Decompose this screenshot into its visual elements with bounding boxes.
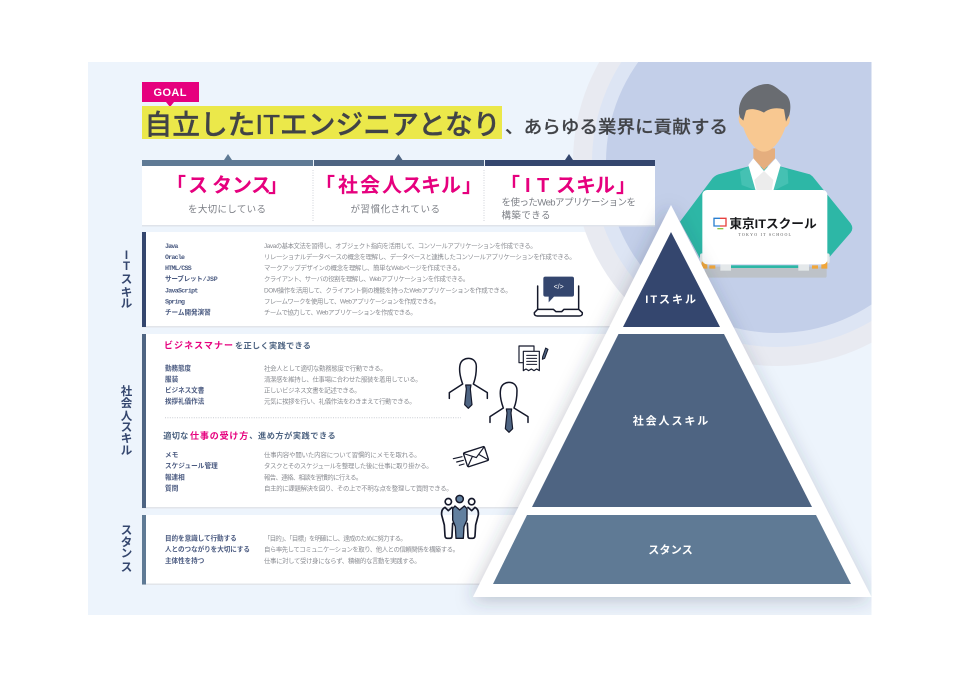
shirt [748, 158, 781, 191]
work approach rows: 報告、連絡、相談を習慣的に行える。 [264, 472, 362, 481]
hair [739, 84, 790, 122]
IT skill rows: チーム開発演習 [165, 308, 211, 317]
logo text: 東京ITスクール [729, 216, 817, 231]
panel: IT skill detail [142, 232, 662, 328]
panel: stance detail [142, 515, 542, 585]
tab: business skill [314, 154, 484, 216]
side label: business skill [121, 384, 133, 457]
side label: stance: ス [121, 562, 132, 574]
icon: documents [519, 346, 548, 371]
tier: business skill: 社会人スキル [633, 414, 708, 428]
side label: IT skill: ス [121, 274, 132, 286]
stance rows: 「目的」、「目標」を明確にし、達成のために努力する。 [264, 534, 407, 543]
stance rows: 自ら率先してコミュニケーションを取り、他人との信頼関係を構築する。 [264, 545, 459, 554]
icon: laptop code: </> [554, 284, 564, 291]
IT skill rows: HTML/CSS [165, 265, 192, 272]
stance rows: 人とのつながりを大切にする [165, 545, 250, 554]
logo icon [714, 218, 726, 229]
heading: business manners: を正しく実践できる [235, 341, 311, 351]
tab: IT skill: 構築できる [502, 210, 550, 222]
business manner rows: 社会人として適切な勤務態度で行動できる。 [264, 363, 387, 372]
heading: work approach [163, 430, 336, 441]
person left [449, 358, 487, 408]
side label: stance [121, 525, 132, 574]
person right [490, 382, 528, 432]
illustration: person with laptop: TOKYO IT SCHOOL [738, 232, 792, 237]
title: 、あらゆる業界に貢献する [505, 117, 728, 137]
IT skill rows: フレームワークを使用して、Webアプリケーションを作成できる。 [264, 296, 440, 306]
laptop screen [702, 190, 827, 264]
tier: IT skill: ITスキル [645, 294, 696, 306]
IT skill rows: マークアップデザインの概念を理解し、簡単なWebページを作成できる。 [264, 263, 464, 272]
tab: stance: を大切にしている [188, 204, 266, 216]
heading: work approach: 、進め方が実践できる [249, 431, 336, 441]
IT skill rows: Javaの基本文法を習得し、オブジェクト指向を活用して、コンソールアプリケーションを作成できる。 [264, 241, 537, 250]
side label: stance: タ [121, 536, 132, 549]
icon: envelope [453, 446, 489, 467]
side label: business skill: 会 [121, 396, 133, 410]
heading: work approach: 仕事の受け方 [190, 430, 248, 441]
icon: business people [449, 358, 528, 432]
side label: business skill: ス [121, 422, 132, 434]
title [142, 106, 728, 140]
icon: laptop code [534, 277, 582, 316]
IT skill rows: Spring [165, 298, 185, 306]
business manner rows: 正しいビジネス文書を記述できる。 [264, 386, 361, 394]
IT skill rows: Oracle [165, 254, 185, 261]
IT skill rows: サーブレット/JSP [165, 274, 218, 283]
stance rows: 目的を意識して行動する [165, 534, 237, 543]
work approach rows: スケジュール管理 [165, 461, 218, 470]
stance rows: 主体性を持つ [165, 556, 205, 565]
side label: IT skill [121, 250, 133, 310]
work approach rows: 質問 [165, 483, 179, 492]
work approach rows: メモ [165, 451, 179, 459]
IT skill rows: Java [165, 243, 178, 250]
side label: business skill: キ [121, 432, 132, 445]
work approach rows [165, 450, 453, 492]
IT skill rows: リレーショナルデータベースの概念を理解し、データベースと連携したコンソールアプリケーションを作成できる。 [264, 252, 576, 261]
face [739, 107, 790, 152]
business manner rows: 清潔感を維持し、仕事場に合わせた服装を着用している。 [264, 374, 422, 383]
side label: IT skill: I [125, 250, 128, 262]
work approach rows: タスクとそのスケジュールを整理した後に仕事に取り掛かる。 [264, 461, 433, 470]
laptop base [705, 267, 827, 278]
side label: stance: ス [121, 525, 132, 537]
business manner rows [165, 363, 422, 406]
tab: stance: 「スタンス」 [166, 174, 288, 197]
business manner rows: 元気に挨拶を行い、礼儀作法をわきまえて行動できる。 [264, 397, 416, 406]
tab: IT skill: 「ITスキル」 [500, 174, 636, 197]
jacket [680, 165, 852, 258]
work approach rows: 報連相 [165, 472, 185, 481]
background circles [573, 62, 872, 366]
pyramid frame [473, 205, 872, 597]
side label: IT skill: T [123, 261, 130, 273]
tier: IT skill [623, 232, 720, 327]
illustration: person with laptop [680, 84, 852, 278]
IT skill rows: クライアント、サーバの役割を理解し、Webアプリケーションを作成できる。 [264, 274, 469, 283]
IT skill rows: JavaScript [165, 288, 198, 294]
stance rows [165, 534, 459, 565]
business manner rows: 服装 [165, 374, 179, 383]
tab: business skill: 「社会人スキル」 [315, 174, 482, 197]
tier: business skill [532, 334, 812, 507]
GOAL tag [142, 82, 199, 107]
IT skill rows: DOM操作を活用して、クライアント側の機能を持ったWebアプリケーションを作成できる。 [264, 286, 512, 294]
business manner rows: 挨拶礼儀作法 [165, 397, 205, 406]
side label: IT skill: ル [121, 298, 133, 310]
IT skill rows: チームで協力して、Webアプリケーションを作成できる。 [264, 308, 417, 317]
heading: business manners: ビジネスマナー [164, 340, 233, 351]
tier: stance [493, 515, 851, 584]
neck [753, 148, 775, 170]
panel: business skill detail [142, 334, 612, 508]
title: 自立したITエンジニアとなり [144, 109, 500, 140]
tab: IT skill [485, 154, 655, 222]
side label: business skill: ル [121, 445, 133, 457]
GOAL tag: GOAL [154, 87, 187, 99]
tier: stance: スタンス [648, 544, 693, 556]
tab: business skill: が習慣化されている [350, 204, 440, 216]
heading: work approach: 適切な [163, 431, 188, 441]
background panel [88, 62, 872, 615]
icon: team [442, 495, 478, 538]
side label: IT skill: キ [121, 286, 132, 299]
side label: business skill: 人 [121, 410, 133, 423]
tab: stance [142, 154, 313, 216]
IT skill rows [165, 241, 576, 317]
panel: three goals [142, 154, 655, 226]
pyramid [473, 205, 872, 597]
business manner rows: 勤務態度 [165, 363, 191, 372]
business manner rows: ビジネス文書 [165, 386, 205, 394]
work approach rows: 自主的に課題解決を図り、その上で不明な点を整理して質問できる。 [264, 483, 453, 492]
work approach rows: 仕事内容や聞いた内容について習慣的にメモを取れる。 [264, 450, 421, 459]
side label: stance: ン [121, 548, 132, 560]
heading: business manners [164, 340, 311, 351]
tab: IT skill: を使ったWebアプリケーションを [502, 196, 636, 208]
stance rows: 仕事に対して受け身にならず、積極的な言動を実践する。 [264, 556, 421, 565]
side label: business skill: 社 [121, 384, 133, 398]
